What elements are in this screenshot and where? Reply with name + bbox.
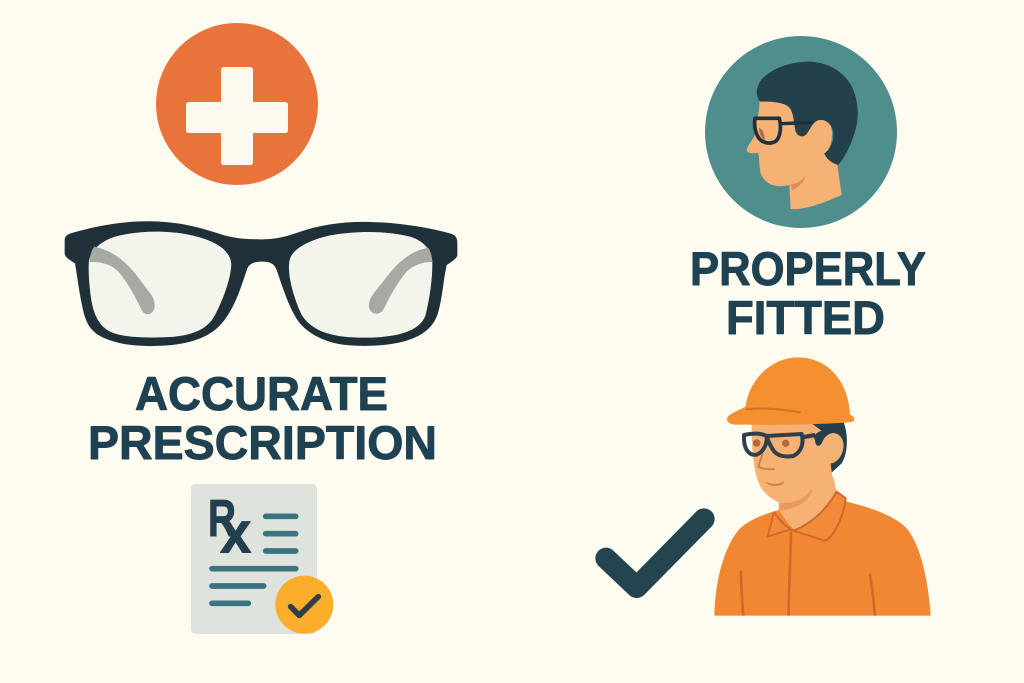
hair: [810, 422, 847, 473]
icon: prescription document: [191, 484, 333, 634]
icon: large check mark: [606, 519, 704, 587]
left temple arm: [89, 247, 155, 314]
shirt: [714, 492, 931, 616]
eyes: [753, 439, 760, 447]
hair: [757, 62, 858, 165]
heading: accurate prescription: [88, 367, 437, 469]
icon: glasses: [65, 221, 457, 346]
face: [752, 423, 844, 506]
illustration: worker in hard hat: [714, 357, 931, 616]
nose and mouth: [758, 453, 774, 469]
left lens: [89, 232, 231, 337]
heading: accurate prescription: PRESCRIPTION: [88, 416, 437, 469]
collar: [768, 492, 846, 541]
heading: properly fitted: FITTED: [726, 291, 885, 344]
heading: properly fitted: PROPERLY: [690, 242, 926, 295]
jaw shadow: [791, 175, 806, 191]
jaw shadow: [779, 488, 812, 511]
glasses: [755, 118, 813, 143]
hat brim line: [747, 409, 800, 412]
text lines: [212, 516, 296, 603]
shirt seams: [741, 532, 875, 616]
hard hat: [727, 357, 854, 425]
neck and face: [747, 100, 842, 209]
icon: medical cross badge: [156, 23, 318, 185]
neck: [778, 477, 837, 530]
heading: accurate prescription: ACCURATE: [135, 367, 388, 420]
right temple arm: [369, 248, 432, 314]
right lens: [289, 232, 432, 338]
hair at ear: [813, 427, 843, 446]
icon: prescription document: x: [220, 501, 251, 565]
Rx symbol: R: [208, 490, 236, 548]
icon: profile head with glasses: [705, 36, 897, 228]
check badge: [275, 576, 333, 634]
heading: properly fitted: [690, 242, 926, 344]
eye mark: [759, 128, 765, 140]
safety glasses: [744, 434, 815, 456]
